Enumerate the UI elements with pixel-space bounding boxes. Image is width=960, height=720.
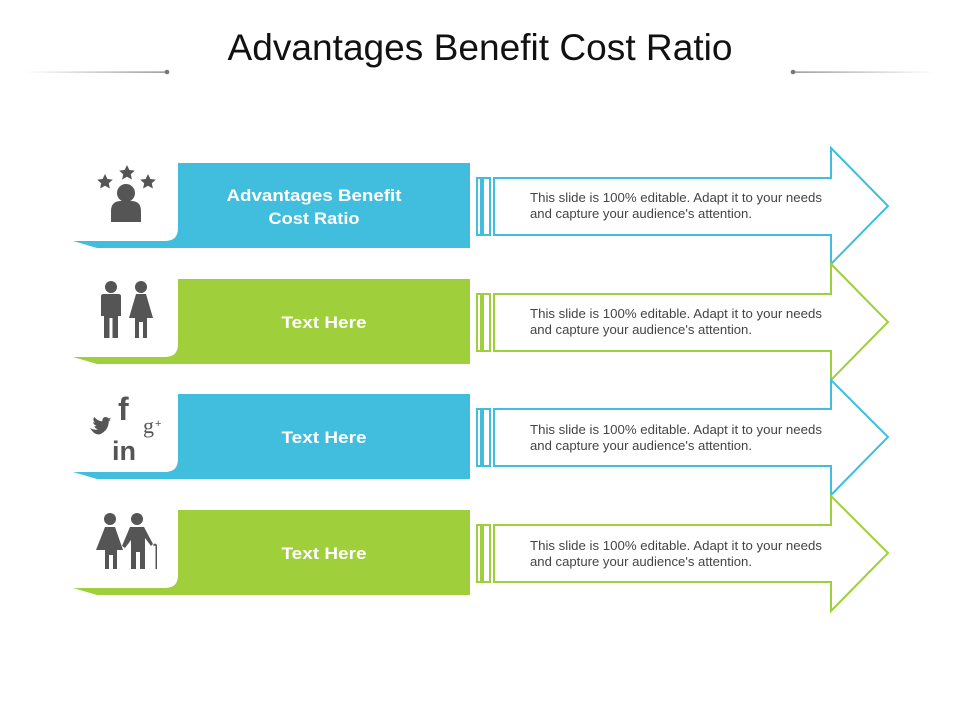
arrow 3 <box>477 380 888 495</box>
icon: social media: + <box>155 418 161 430</box>
row 2 <box>73 264 888 380</box>
row 3 <box>73 380 888 495</box>
title <box>25 27 935 74</box>
description 4: and capture your audience's attention. <box>530 555 752 569</box>
arrow 1 <box>477 148 888 264</box>
label block 4: Text Here <box>282 544 366 563</box>
icon: man and woman <box>101 281 153 338</box>
description 3: This slide is 100% editable. Adapt it to your needs <box>530 423 822 437</box>
description 4 <box>530 539 822 569</box>
label block 2 <box>73 279 470 364</box>
description 3 <box>530 423 822 453</box>
label block 4 <box>73 510 470 595</box>
label block 1: Cost Ratio <box>268 209 360 228</box>
icon: social media: in <box>112 436 136 466</box>
description 3: and capture your audience's attention. <box>530 439 752 453</box>
label block 3 <box>73 394 470 479</box>
description 2: and capture your audience's attention. <box>530 323 752 337</box>
icon: person with stars <box>97 165 156 222</box>
description 2 <box>530 307 822 337</box>
description 2: This slide is 100% editable. Adapt it to your needs <box>530 307 822 321</box>
title: Advantages Benefit Cost Ratio <box>228 27 732 68</box>
label block 1: Advantages Benefit <box>226 186 402 205</box>
icon: social media <box>90 391 161 466</box>
row 4 <box>73 496 888 611</box>
description 4: This slide is 100% editable. Adapt it to your needs <box>530 539 822 553</box>
description 1 <box>530 191 822 221</box>
label block 1 <box>73 163 470 248</box>
icon: social media: f <box>118 391 129 427</box>
icon: elderly couple <box>96 513 157 569</box>
arrow 2 <box>477 264 888 380</box>
description 1: and capture your audience's attention. <box>530 207 752 221</box>
label block 2: Text Here <box>282 313 366 332</box>
arrow 4 <box>477 496 888 611</box>
icon: social media: g <box>143 413 154 438</box>
row 1 <box>73 148 888 264</box>
label block 3: Text Here <box>282 428 366 447</box>
description 1: This slide is 100% editable. Adapt it to your needs <box>530 191 822 205</box>
